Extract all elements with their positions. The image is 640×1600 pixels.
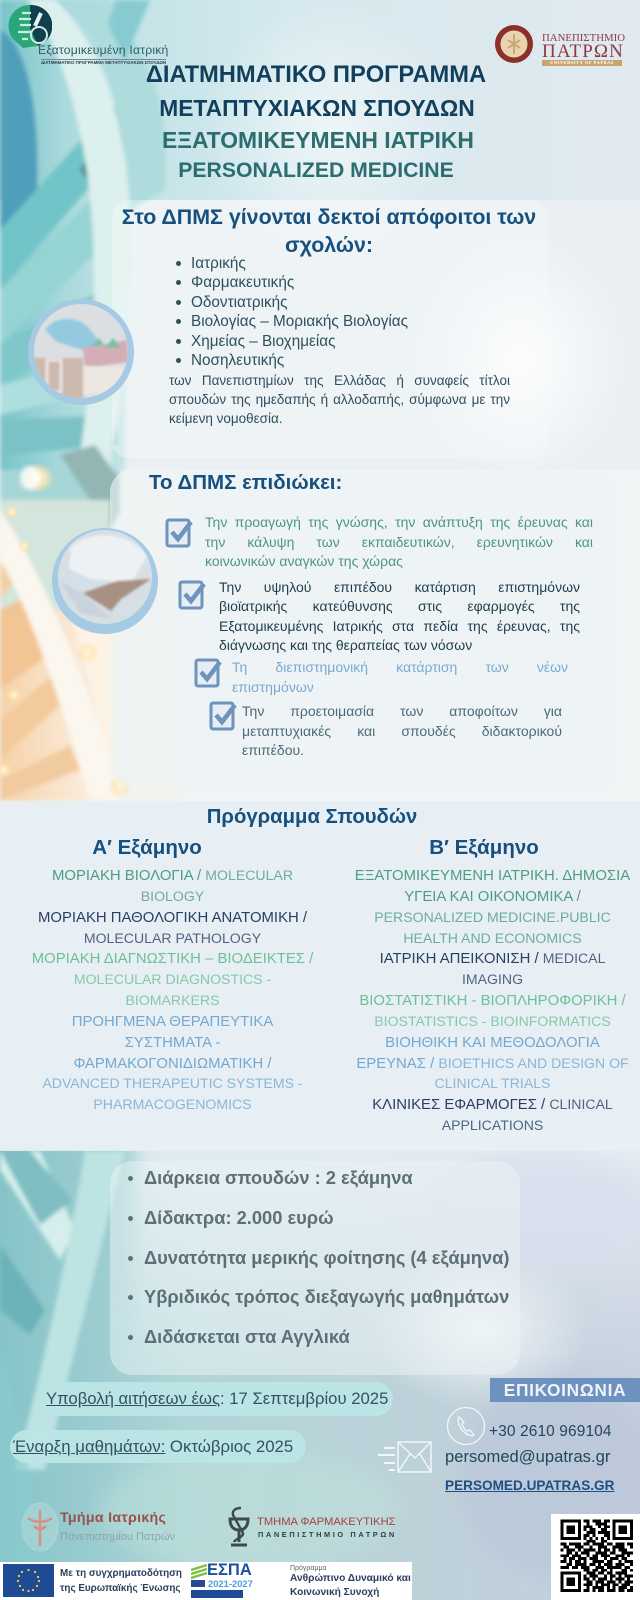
ESPA logo [191,1561,253,1598]
title line 2: ΜΕΤΑΠΤΥΧΙΑΚΩΝ ΣΠΟΥΔΩΝ [159,95,475,121]
objective 2 [178,579,580,653]
logo: Department of Pharmacy [228,1506,397,1546]
fact: hybrid: Υβριδικός τρόπος διεξαγωγής μαθημάτων [144,1286,509,1307]
objective text [219,579,580,653]
panel: objectives background [110,470,612,788]
course list: ΒΙΟΣΤΑΤΙΣΤΙΚΗ - ΒΙΟΠΛΗΡΟΦΟΡΙΚΗ / [359,993,626,1009]
funding text: της Ευρωπαϊκής Ένωσης [60,1583,181,1594]
objective text: κοινωνικών αναγκών της χώρας [205,553,403,569]
department university: Πανεπιστημίου Πατρών [60,1531,175,1543]
university wordmark: ΠΑΝΕΠΙΣΤΗΜΙΟ [542,32,625,44]
fact: duration: Διάρκεια σπουδών : 2 εξάμηνα [144,1167,413,1188]
course list: APPLICATIONS [442,1117,543,1133]
funding text: Με τη συγχρηματοδότηση [60,1568,182,1579]
text: admission note: σπουδών της ημεδαπής ή αλλοδαπής, σύμφωνα με την [169,392,510,407]
objective text: την κάλυψη των εκπαιδευτικών, ερευνητικών και [205,534,593,550]
QR code [551,1514,640,1600]
course list: BIOLOGY [141,888,204,904]
contact website: PERSOMED.UPATRAS.GR [445,1478,614,1493]
course list: ΚΛΙΝΙΚΕΣ ΕΦΑΡΜΟΓΕΣ / CLINICAL [372,1096,613,1113]
heading: admission: Στο ΔΠΜΣ γίνονται δεκτοί απόφοιτοι των [122,205,536,229]
band: programme of studies background [0,801,640,1151]
objective 1 [166,514,593,569]
semester heading: Α′ Εξάμηνο [92,836,202,859]
objective text: Εξατομικευμένης Ιατρικής στα πεδία της έρευνας, της [219,618,580,634]
logo wordmark: Εξατομικευμένη Ιατρική [38,43,169,57]
heading: admission: σχολών: [285,233,373,257]
heading: admission [122,205,536,257]
logo tagline: ΔΙΑΤΜΗΜΑΤΙΚΟ ΠΡΟΓΡΑΜΜΑ ΜΕΤΑΠΤΥΧΙΑΚΩΝ ΣΠΟΥΔΩΝ [41,60,166,65]
course list: ΜΟΡΙΑΚΗ ΒΙΟΛΟΓΙΑ / MOLECULAR [52,867,293,884]
course list: MOLECULAR DIAGNOSTICS - [74,971,271,987]
icon: university seal [495,25,533,63]
list: eligible schools [176,255,408,369]
university wordmark: ΠΑΤΡΩΝ [542,41,624,62]
funding text [60,1568,182,1594]
course list: ΒΙΟΗΘΙΚΗ ΚΑΙ ΜΕΘΟΔΟΛΟΓΙΑ [385,1035,600,1051]
column: second semester [355,836,630,1133]
list: eligible schools: Ιατρικής [191,255,246,272]
course list: PERSONALIZED MEDICINE.PUBLIC [374,909,611,925]
ESPA logo: 2021-2027 [208,1578,253,1589]
image: hands with crystals circle [52,528,158,634]
course list: BIOSTATISTICS - BIOINFORMATICS [374,1013,611,1029]
pill: classes start [10,1430,306,1463]
list: eligible schools: Φαρμακευτικής [191,274,294,291]
objective text: επιστημόνων [232,679,314,695]
icon: EU flag [3,1564,54,1597]
course list: ΜΟΡΙΑΚΗ ΠΑΘΟΛΟΓΙΚΗ ΑΝΑΤΟΜΙΚΗ / [38,910,307,926]
course list: ΣΥΣΤΗΜΑΤΑ - [125,1035,220,1051]
course list: PHARMACOGENOMICS [93,1096,252,1112]
objective text: μεταπτυχιακές και σπουδές διδακτορικού [242,723,562,739]
icon: checkbox [178,580,206,610]
course list: ADVANCED THERAPEUTIC SYSTEMS - [42,1075,303,1091]
icon: bowl of Hygieia [228,1506,250,1546]
logo: Department of Medicine [22,1502,175,1552]
objective 4 [210,702,562,758]
contact heading: ΕΠΙΚΟΙΝΩΝΙΑ [504,1380,626,1400]
contact heading [490,1378,640,1402]
course list: BIOMARKERS [126,992,219,1008]
pill: classes start: Έναρξη μαθημάτων: Οκτώβριος 2025 [13,1437,293,1456]
university wordmark [542,32,625,66]
pharmacy name: ΤΜΗΜΑ ΦΑΡΜΑΚΕΥΤΙΚΗΣ [257,1516,396,1528]
heading: objectives: Το ΔΠΜΣ επιδιώκει: [149,471,342,494]
pill: application deadline [43,1382,393,1416]
course list: ΠΡΟΗΓΜΕΝΑ ΘΕΡΑΠΕΥΤΙΚΑ [72,1014,273,1030]
objective 3 [194,658,568,695]
course list: MOLECULAR PATHOLOGY [84,930,261,946]
text: admission note: των Πανεπιστημίων της Ελλάδας ή συναφείς τίτλοι [169,373,510,388]
title line 4: PERSONALIZED MEDICINE [178,159,454,182]
university wordmark: UNIVERSITY OF PATRAS [550,60,614,65]
text: admission note [169,373,510,426]
list: eligible schools: Χημείας – Βιοχημείας [191,333,335,350]
course list: HEALTH AND ECONOMICS [403,930,582,946]
objective text: Τη διεπιστημονική κατάρτιση των νέων [232,659,568,675]
course list: ΕΞΑΤΟΜΙΚΕΥΜΕΝΗ ΙΑΤΡΙΚΗ. ΔΗΜΟΣΙΑ [355,868,630,884]
column: first semester [32,836,314,1112]
text: admission note: κείμενη νομοθεσία. [169,411,283,426]
logo: University of Patras [495,25,625,66]
icon: checkbox [210,702,237,730]
course list [355,868,630,1133]
panel: key facts [110,1161,520,1375]
ESPA logo: ΕΣΠΑ [207,1561,252,1579]
objective text: επιπέδου. [242,742,304,758]
title block [146,62,486,182]
icon: caduceus [22,1502,58,1552]
course list: ΦΑΡΜΑΚΟΓΟΝΙΔΙΩΜΑΤΙΚΗ / [73,1056,272,1072]
icon: checkbox [194,658,222,688]
department name: Τμήμα Ιατρικής [60,1510,166,1526]
programme name: Ανθρώπινο Δυναμικό και [290,1573,411,1584]
list: eligible schools: Οδοντιατρικής [191,294,288,311]
pill: application deadline: Υποβολή αιτήσεων έως: 17 Σεπτεμβρίου 2025 [46,1389,388,1408]
programme name: Κοινωνική Συνοχή [290,1587,379,1598]
objective text [205,514,593,569]
fact: language: Διδάσκεται στα Αγγλικά [144,1326,350,1347]
course list: ΕΡΕΥΝΑΣ / BIOETHICS AND DESIGN OF [356,1055,629,1072]
title line 3: ΕΞΑΤΟΜΙΚΕΥΜΕΝΗ ΙΑΤΡΙΚΗ [162,127,474,153]
course list: ΙΑΤΡΙΚΗ ΑΠΕΙΚΟΝΙΣΗ / MEDICAL [380,950,605,967]
objective text: Την προαγωγή της γνώσης, την ανάπτυξη της έρευνας και [205,514,593,530]
objective text [242,703,562,758]
icon: checkbox [166,518,193,548]
course list: ΜΟΡΙΑΚΗ ΔΙΑΓΝΩΣΤΙΚΗ – ΒΙΟΔΕΙΚΤΕΣ / [32,951,313,967]
objective text: Την υψηλού επιπέδου κατάρτιση επιστημόνων [219,579,580,595]
list: eligible schools: Νοσηλευτικής [191,352,284,369]
programme name [290,1573,411,1598]
icon: envelope [378,1441,432,1473]
objective text [232,659,568,695]
fact: fees: Δίδακτρα: 2.000 ευρώ [144,1207,334,1228]
logo: personalized medicine [8,5,169,65]
icon: phone [446,1406,486,1446]
panel: admission background [112,200,548,458]
course list: IMAGING [462,971,523,987]
list: eligible schools: Βιολογίας – Μοριακής Βιολογίας [191,313,408,330]
semester heading: Β′ Εξάμηνο [429,836,539,859]
footer: funding strip [0,1562,412,1600]
image: lab hand circle [28,299,134,405]
course list: CLINICAL TRIALS [435,1075,550,1091]
course list: ΥΓΕΙΑ ΚΑΙ ΟΙΚΟΝΟΜΙΚΑ / [404,889,581,905]
objective text: βιοϊατρικής κατεύθυνσης στις εφαρμογές της [219,598,580,614]
objective text: Την προετοιμασία των αποφοίτων για [242,703,562,719]
contact email: persomed@upatras.gr [445,1447,610,1466]
contact phone: +30 2610 969104 [489,1423,612,1440]
title line 1: ΔΙΑΤΜΗΜΑΤΙΚΟ ΠΡΟΓΡΑΜΜΑ [146,62,486,88]
fact: part-time: Δυνατότητα μερικής φοίτησης (4 εξάμηνα) [144,1247,509,1268]
pharmacy university: ΠΑΝΕΠΙΣΤΗΜΙΟ ΠΑΤΡΩΝ [258,1530,397,1539]
programme small label: Πρόγραμμα [290,1565,327,1572]
icon: DNA and microscope badge [8,5,52,48]
heading: programme of studies: Πρόγραμμα Σπουδών [207,806,417,828]
objective text: διάγνωσης και της θεραπείας των νόσων [219,637,472,653]
course list [32,867,314,1112]
